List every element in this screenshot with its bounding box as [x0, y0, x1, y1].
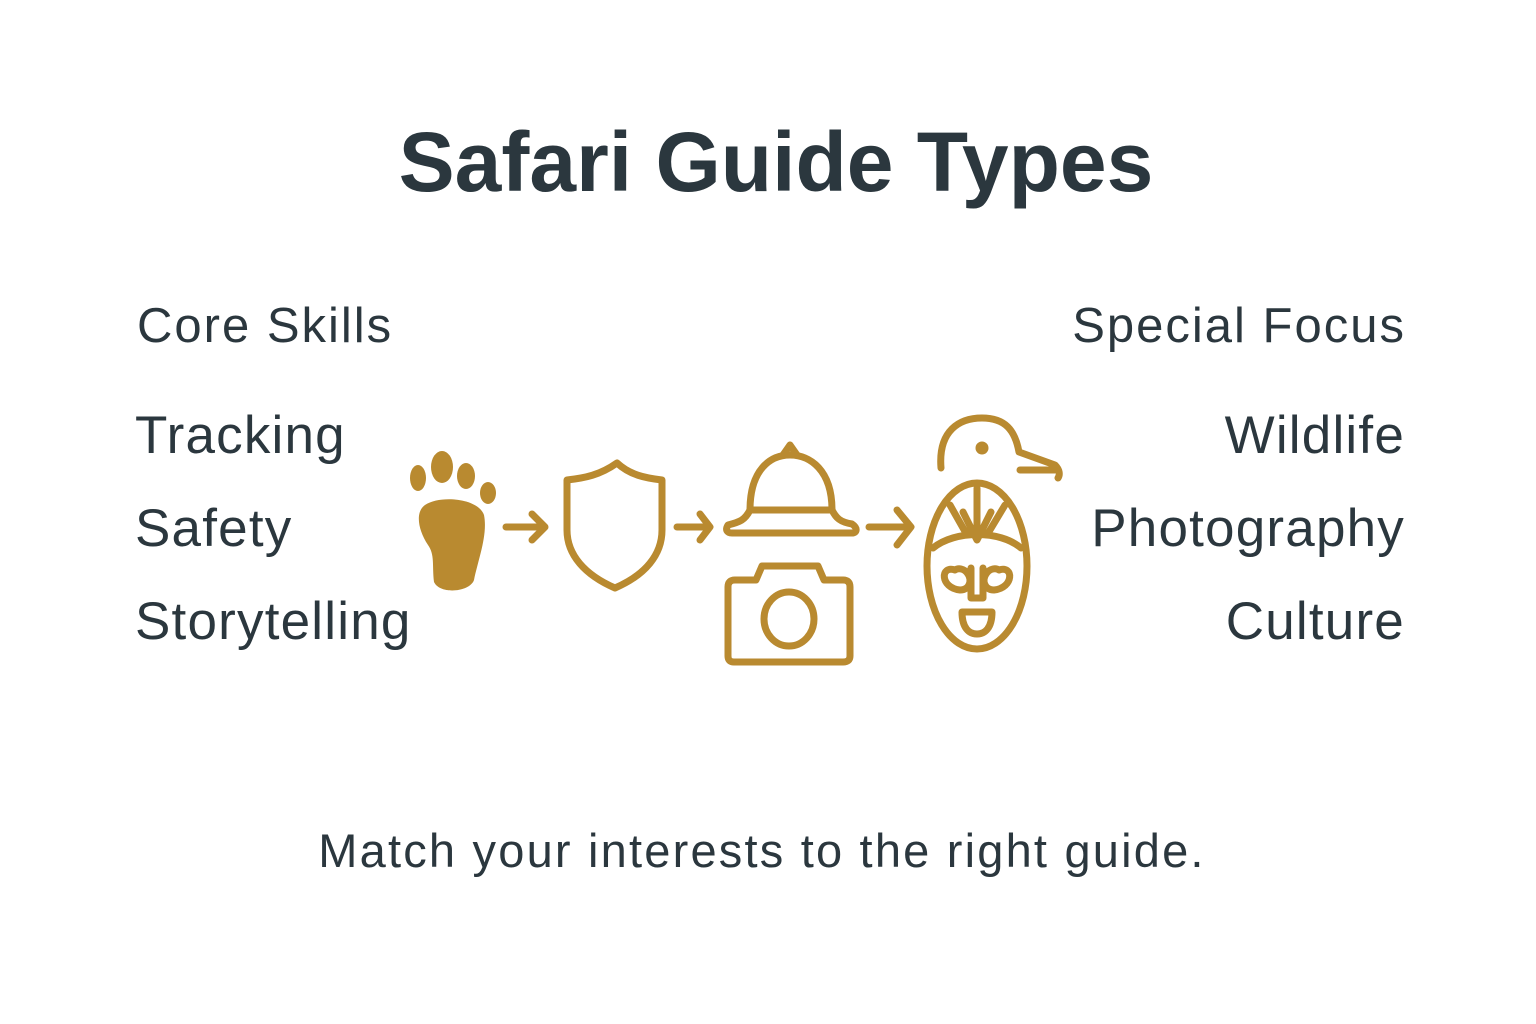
list: core skills: Tracking: [135, 406, 346, 465]
arrow 3: [869, 510, 911, 545]
list: core skills: Storytelling: [135, 592, 412, 651]
icon: safari hat: [727, 445, 856, 533]
arrow 1: [506, 514, 545, 540]
arrow 2: [677, 514, 710, 540]
icon: mask: [927, 483, 1027, 649]
icon: camera: [728, 566, 850, 662]
list: special focus: Culture: [1226, 592, 1405, 651]
title: Safari Guide Types: [399, 115, 1153, 209]
list: special focus: Wildlife: [1225, 406, 1405, 465]
list: core skills: [135, 406, 412, 651]
icon: bird: [941, 418, 1059, 478]
icon: footprint: [410, 451, 496, 590]
list: core skills: Safety: [135, 499, 292, 558]
heading: core skills: Core Skills: [137, 299, 393, 353]
heading: special focus: Special Focus: [1072, 299, 1406, 353]
list: special focus: [1091, 406, 1405, 651]
list: special focus: Photography: [1091, 499, 1405, 558]
icon: shield: [567, 463, 662, 588]
footer tagline: Match your interests to the right guide.: [318, 824, 1206, 877]
